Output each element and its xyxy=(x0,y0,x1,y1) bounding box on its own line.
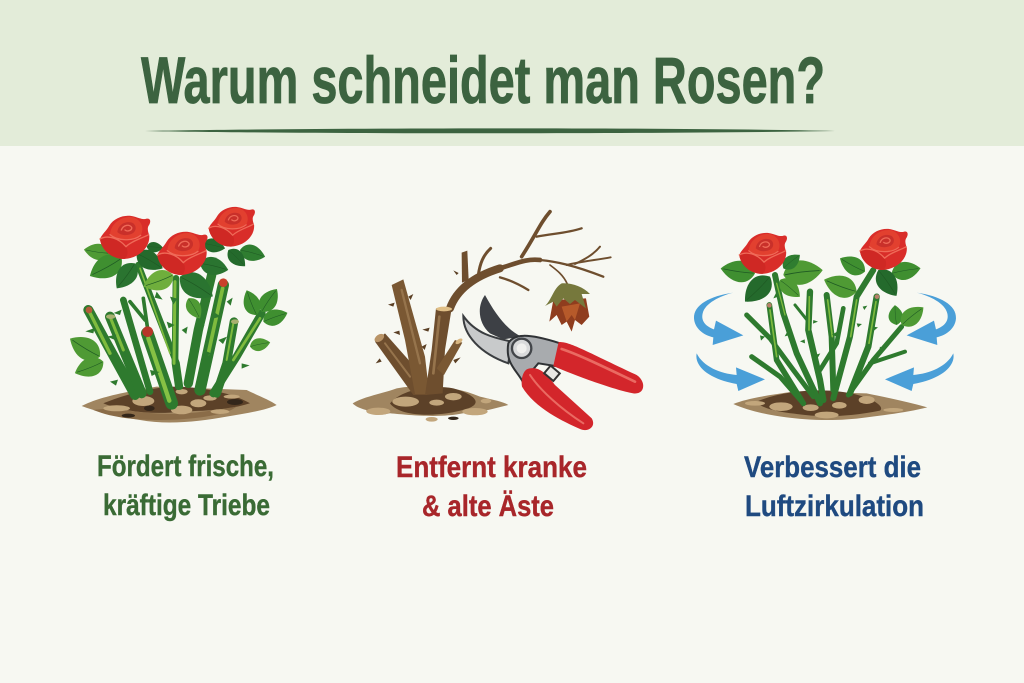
label: remove diseased wood: & alte Äste xyxy=(422,490,554,523)
label: air circulation xyxy=(744,451,924,523)
icon: pruning shears xyxy=(463,295,643,430)
label: remove diseased wood xyxy=(396,451,587,523)
arrow: upper right xyxy=(907,293,956,345)
icon: wilted flower xyxy=(545,283,590,332)
arrow: lower left xyxy=(696,353,765,391)
label: fresh shoots: kräftige Triebe xyxy=(103,489,270,522)
illustration: open rose bush with two blooms xyxy=(719,229,929,420)
arrow: lower right xyxy=(885,353,954,391)
label: remove diseased wood: Entfernt kranke xyxy=(396,451,587,484)
illustration: rose bush with three blooms xyxy=(64,207,290,422)
illustration: soil and pruned stumps xyxy=(353,212,611,422)
label: air circulation: Verbessert die xyxy=(744,451,921,484)
icon: airflow arrows xyxy=(694,293,956,391)
panel: fresh shoots xyxy=(64,207,290,522)
title underline xyxy=(145,128,835,133)
header band xyxy=(0,0,1024,146)
label: fresh shoots xyxy=(97,450,274,522)
panel: remove diseased wood xyxy=(353,212,643,523)
arrow: upper left xyxy=(694,293,743,345)
label: air circulation: Luftzirkulation xyxy=(745,490,924,523)
panel: air circulation xyxy=(694,229,956,523)
label: fresh shoots: Fördert frische, xyxy=(97,450,274,483)
